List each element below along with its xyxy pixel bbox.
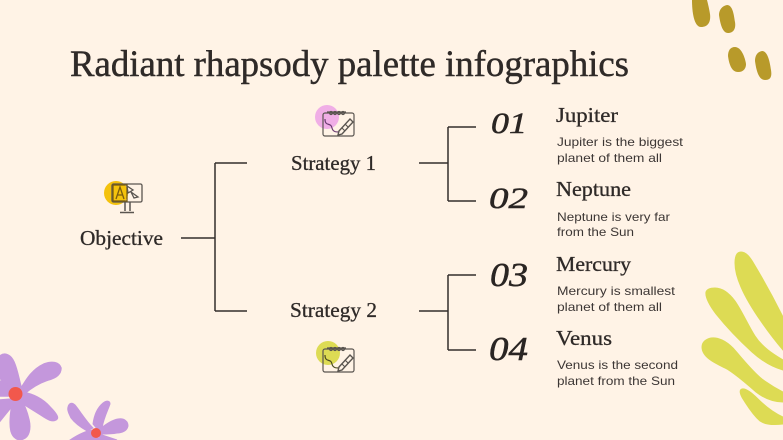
item 01: Jupiter: Jupiter is the biggest xyxy=(557,135,684,149)
item 03: Mercury: Mercury is smallest xyxy=(557,284,676,298)
item 02: Neptune: 02 xyxy=(489,182,528,215)
item 04: Venus: Venus xyxy=(556,326,612,350)
icon: notebook with pencil (pink) xyxy=(315,105,354,136)
item 01: Jupiter: planet of them all xyxy=(557,151,662,165)
icon: notebook with pencil (green) xyxy=(316,341,354,372)
item 03: Mercury: planet of them all xyxy=(557,300,662,314)
item 02: Neptune: from the Sun xyxy=(557,225,634,239)
label: strategy 1: Strategy 1 xyxy=(291,151,376,175)
item 01: Jupiter: 01 xyxy=(491,107,527,140)
decoration: small purple flower xyxy=(68,401,128,440)
item 04: Venus: planet from the Sun xyxy=(557,374,675,388)
label: strategy 2: Strategy 2 xyxy=(290,298,377,322)
item 03: Mercury: 03 xyxy=(490,257,528,294)
item 04: Venus: 04 xyxy=(489,331,528,368)
item 02: Neptune: Neptune is very far xyxy=(557,210,670,224)
item 02: Neptune xyxy=(489,177,670,239)
title: Radiant rhapsody palette infographics xyxy=(70,44,629,85)
decoration: large purple flower xyxy=(0,354,61,440)
connector lines: strategy 2 to items xyxy=(419,275,476,350)
decoration: green leaves bottom right xyxy=(702,252,783,425)
connector lines: strategy 1 to items xyxy=(419,127,476,201)
decoration: brown spots top right xyxy=(692,0,771,80)
item 03: Mercury: Mercury xyxy=(556,252,632,276)
icon: monitor with letter A xyxy=(104,181,142,212)
item 04: Venus: Venus is the second xyxy=(557,358,678,372)
item 02: Neptune: Neptune xyxy=(556,177,631,201)
item 03: Mercury xyxy=(490,252,676,314)
label: objective: Objective xyxy=(80,226,163,250)
item 04: Venus xyxy=(489,326,678,388)
connector lines: objective to strategies xyxy=(181,163,247,311)
item 01: Jupiter: Jupiter xyxy=(556,103,618,127)
item 01: Jupiter xyxy=(491,103,684,165)
